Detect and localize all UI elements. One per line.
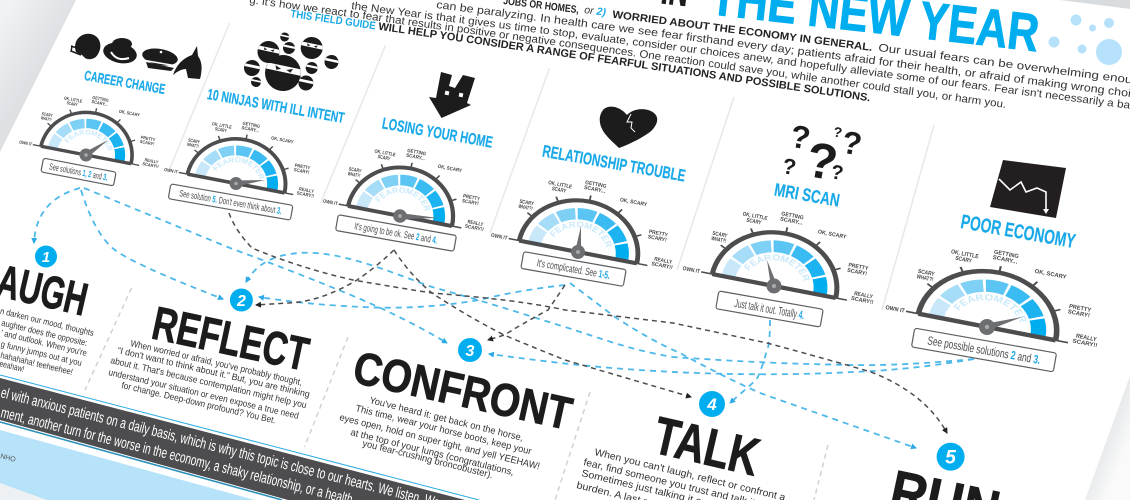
gauge: career change: SCARY! bbox=[139, 139, 155, 147]
callout: relationship trouble: It's complicated. See 1-5. bbox=[536, 257, 611, 281]
badge 3: 3 bbox=[466, 343, 475, 360]
badge 1 bbox=[35, 246, 57, 268]
gauge: relationship trouble: GETTING bbox=[584, 180, 607, 190]
gauge: ninjas: SCARY!! bbox=[296, 191, 315, 200]
intro text block: WORRIED ABOUT THE ECONOMY IN GENERAL. bbox=[612, 9, 873, 54]
icon: question marks: ? bbox=[829, 161, 845, 185]
gauge: ninjas: GETTING bbox=[242, 121, 261, 130]
callout: mri scan bbox=[716, 291, 823, 327]
text: reflect bbox=[108, 338, 311, 425]
intro text block: Our usual fears can be overwhelming enou bbox=[878, 42, 1130, 87]
gauge: relationship trouble: REALLY bbox=[654, 257, 673, 266]
gauge: poor economy bbox=[885, 249, 1098, 349]
gauge: poor economy: WHAT?! bbox=[916, 274, 934, 283]
gauge: relationship trouble bbox=[490, 180, 673, 271]
intro text block: THIS FIELD GUIDE bbox=[290, 8, 376, 32]
gauge: poor economy: SCARY!! bbox=[1072, 338, 1098, 349]
heading: losing your home: LOSING YOUR HOME bbox=[381, 115, 494, 152]
gauge: losing your home: SCARY!! bbox=[464, 224, 484, 233]
icon: falling chart bbox=[990, 160, 1066, 218]
gauge: relationship trouble: OWN IT bbox=[490, 233, 508, 242]
gauge: losing your home: SCARY! bbox=[461, 198, 479, 207]
icon: upside-down house bbox=[429, 72, 475, 118]
icon: broken heart bbox=[600, 107, 657, 148]
text: laugh: ' and outlook. When you're bbox=[0, 328, 88, 358]
gauge: poor economy: SCARY bbox=[917, 268, 936, 278]
gauge: ninjas: OK, LITTLE bbox=[211, 121, 233, 131]
gauge: losing your home: WHAT?! bbox=[347, 171, 361, 179]
gauge: career change: OK, LITTLE bbox=[64, 96, 83, 104]
gauge: mri scan bbox=[682, 211, 874, 306]
footer band: NHO bbox=[0, 453, 17, 464]
gauge: ninjas: WHAT?! bbox=[186, 142, 200, 150]
badge 2: 2 bbox=[236, 293, 246, 310]
decorative bubbles bbox=[1048, 14, 1122, 65]
gauge: mri scan: GETTING bbox=[781, 211, 805, 221]
gauge: losing your home: OWN IT bbox=[322, 199, 339, 207]
callout: poor economy bbox=[911, 328, 1057, 372]
gauge: career change: SCARY bbox=[66, 100, 78, 107]
heading: poor economy: POOR ECONOMY bbox=[959, 211, 1078, 253]
gauge: career change: GETTING bbox=[92, 95, 110, 103]
callout: poor economy: See possible solutions 2 and 3. bbox=[926, 335, 1041, 368]
gauge: losing your home: SCARY bbox=[377, 154, 391, 162]
icon: question marks: ? bbox=[839, 124, 865, 163]
gauge: mri scan: OK, LITTLE bbox=[742, 211, 768, 222]
badge 2 bbox=[230, 288, 253, 312]
gauge: relationship trouble: SCARY!! bbox=[651, 262, 673, 271]
gauge: losing your home: SCARY bbox=[348, 167, 362, 175]
gauge: relationship trouble: WHAT?! bbox=[518, 204, 533, 212]
icon: question marks: ? bbox=[802, 131, 842, 191]
gauge: ninjas: OWN IT bbox=[164, 167, 178, 175]
badge 4 bbox=[699, 391, 725, 417]
gauge: losing your home: GETTING bbox=[407, 148, 427, 157]
text: reflect: about it. That's because contemplation might help you bbox=[110, 355, 308, 410]
title bbox=[659, 0, 1042, 63]
icon: ninjas bbox=[243, 32, 340, 94]
blue dashed arrows bbox=[34, 188, 974, 448]
gauge: relationship trouble: SCARY bbox=[519, 199, 534, 207]
text: confront: You've heard it: get back on the horse, bbox=[368, 395, 524, 444]
callout: career change: See solutions 1, 2 and 3. bbox=[48, 161, 109, 183]
gauge: career change bbox=[19, 95, 160, 169]
column dividers bbox=[85, 288, 828, 500]
intro text block: the New Year is that it gives us time to stop, evaluate, consider our choices anew, and hopefully alleviate some of our fears. Fear isn't necessarily a ba bbox=[351, 0, 1130, 112]
gauge: losing your home: OK, LITTLE bbox=[374, 149, 396, 158]
gauge: mri scan: OK, SCARY bbox=[817, 229, 847, 240]
gauge: mri scan: REALLY bbox=[853, 290, 873, 300]
desk corner bottom right bbox=[1085, 376, 1130, 500]
gauge: mri scan: SCARY bbox=[712, 230, 728, 239]
text: confront: you fear-crushing broncobuster). bbox=[361, 438, 494, 481]
gauge: poor economy: FEAROMETER bbox=[953, 294, 1026, 322]
text: reflect: understand your situation or even expose a true need bbox=[108, 367, 300, 421]
heading: talk: TALK bbox=[648, 406, 765, 488]
gauge: mri scan: PRETTY bbox=[848, 262, 869, 272]
badge 5: 5 bbox=[945, 448, 956, 468]
gauge: relationship trouble: SCARY bbox=[551, 186, 567, 195]
gauge: poor economy: SCARY bbox=[955, 255, 973, 265]
text: laugh bbox=[0, 306, 95, 377]
heading: career change: CAREER CHANGE bbox=[83, 67, 167, 97]
callout: relationship trouble bbox=[521, 252, 626, 286]
intro text block: can be paralyzing. In health care we see fear firsthand every day; patients afraid for their health, or afraid of making wrong choi bbox=[436, 0, 1130, 100]
heading: reflect: REFLECT bbox=[148, 296, 314, 381]
gauge: losing your home bbox=[322, 148, 484, 233]
gauge: ninjas: SCARY bbox=[214, 126, 228, 134]
panel separators bbox=[168, 23, 934, 310]
gauge: poor economy: SCARY! bbox=[1067, 309, 1090, 319]
gauge: losing your home: FEAROMETER bbox=[374, 187, 430, 212]
gauge: mri scan: SCARY! bbox=[846, 267, 868, 277]
text: laugh: g funny jumps out at you bbox=[0, 339, 83, 368]
callout: ninjas: See solution 5. Don't even think about 3. bbox=[179, 188, 283, 217]
intro text block: WILL HELP YOU CONSIDER A RANGE OF FEARFUL SITUATIONS AND POSSIBLE SOLUTIONS. bbox=[378, 21, 871, 104]
text: reflect: “I don't want to think about it.” But, you are thinking bbox=[117, 345, 311, 399]
intro text block: or 2) bbox=[584, 4, 607, 19]
gauge: ninjas: PRETTY bbox=[294, 163, 311, 172]
gauge: career change: REALLY bbox=[144, 157, 159, 165]
desk corner top right bbox=[1060, 0, 1130, 9]
gauge: career change: SCARY... bbox=[91, 99, 108, 107]
gauge: relationship trouble: SCARY... bbox=[583, 185, 606, 195]
callout: mri scan: Just talk it out. Totally 4. bbox=[734, 296, 805, 321]
gauge: career change: OK, SCARY bbox=[118, 109, 140, 118]
gauge: losing your home: REALLY bbox=[467, 219, 484, 228]
icon: question marks: ? bbox=[788, 118, 813, 157]
badge 3 bbox=[458, 338, 482, 362]
gauge: poor economy: SCARY... bbox=[992, 255, 1018, 265]
gauge: mri scan: SCARY!! bbox=[850, 295, 874, 306]
gauge: mri scan: SCARY... bbox=[779, 216, 803, 227]
text: confront: eyes open, hold on super tight, and yell YEEHAW! bbox=[338, 412, 541, 472]
icon: question marks: ? bbox=[781, 153, 798, 180]
text: reflect: When worried or afraid, you've probably thought, bbox=[130, 338, 303, 388]
gauge: mri scan: WHAT?! bbox=[711, 235, 727, 245]
gauge: relationship trouble: OK, LITTLE bbox=[548, 180, 572, 190]
heading: mri scan: MRI SCAN bbox=[773, 180, 841, 211]
heading: ninjas: 10 NINJAS WITH ILL INTENT bbox=[206, 86, 346, 127]
gauge: career change: OWN IT bbox=[19, 140, 33, 147]
gauge: losing your home: PRETTY bbox=[462, 194, 481, 203]
gauge: mri scan: SCARY bbox=[746, 217, 762, 226]
callout: losing your home: It's going to be ok. See 2 and 4. bbox=[354, 221, 438, 246]
gauge: ninjas: OK, SCARY bbox=[270, 136, 295, 146]
gauge: career change: PRETTY bbox=[140, 135, 156, 142]
gauge: career change: WHAT?! bbox=[40, 115, 52, 122]
gauge: ninjas: REALLY bbox=[298, 186, 315, 195]
badge 1: 1 bbox=[42, 249, 50, 266]
text: laugh: aughter does the opposite: bbox=[0, 318, 88, 348]
gauge: relationship trouble: FEAROMETER bbox=[550, 222, 612, 248]
badge 5 bbox=[937, 443, 965, 471]
callout: losing your home bbox=[336, 215, 456, 251]
gauge: ninjas: SCARY bbox=[187, 138, 201, 146]
text: laugh: n darken our mood, thoughts bbox=[0, 306, 95, 338]
gauge: poor economy: GETTING bbox=[993, 249, 1019, 260]
desk corner top left bbox=[0, 0, 76, 152]
icon: question marks bbox=[781, 118, 865, 191]
gauge: relationship trouble: OK, SCARY bbox=[619, 197, 648, 208]
gauge: career change: SCARY bbox=[41, 111, 53, 118]
gauge: relationship trouble: SCARY! bbox=[647, 234, 667, 244]
gauge: ninjas: SCARY! bbox=[293, 167, 310, 176]
gauge: poor economy: REALLY bbox=[1075, 333, 1098, 343]
heading: relationship trouble: RELATIONSHIP TROUBLE bbox=[541, 142, 687, 186]
gauge: ninjas: FEAROMETER bbox=[212, 157, 264, 180]
gauge: losing your home: OK, SCARY bbox=[437, 164, 463, 174]
gauge: ninjas: SCARY... bbox=[241, 125, 260, 134]
icon: career hats bbox=[71, 34, 202, 79]
gauge: career change: FEAROMETER bbox=[64, 130, 112, 151]
text: confront: at the top of your lungs (congratulations, bbox=[349, 427, 515, 478]
text: confront: This time, wear your horse boots, keep your bbox=[354, 403, 533, 458]
gauge: poor economy: OK, LITTLE bbox=[950, 249, 980, 260]
gauge: relationship trouble: PRETTY bbox=[648, 229, 668, 239]
dark dashed arrows bbox=[229, 213, 947, 433]
badge 4: 4 bbox=[706, 395, 717, 414]
gauge: mri scan: OWN IT bbox=[682, 265, 701, 275]
text: reflect: for change. Deep-down profound? You Bet. bbox=[121, 380, 277, 425]
callout: ninjas bbox=[168, 184, 293, 220]
text: laugh: hahahaha! teeheehee! bbox=[0, 350, 74, 377]
heading: confront: CONFRONT bbox=[349, 341, 577, 440]
icon: question marks: ? bbox=[832, 123, 843, 141]
gauge: losing your home: SCARY... bbox=[405, 153, 426, 162]
gauge: poor economy: PRETTY bbox=[1068, 303, 1092, 314]
gauge: ninjas bbox=[164, 121, 315, 200]
gauge: mri scan: FEAROMETER bbox=[744, 254, 810, 282]
gauge: poor economy: OWN IT bbox=[885, 305, 905, 314]
gauge: career change: SCARY!! bbox=[142, 161, 160, 169]
gauge: poor economy: OK, SCARY bbox=[1034, 268, 1067, 281]
callout: career change bbox=[41, 158, 116, 186]
